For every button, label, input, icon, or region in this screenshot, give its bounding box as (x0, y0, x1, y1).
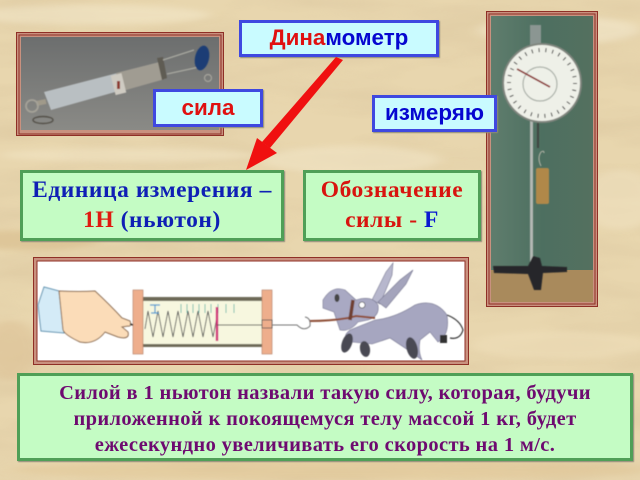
box: unit of measurement: Единица измерения – (32, 177, 272, 203)
label: Динамометр: Динамометр (270, 25, 408, 50)
box: newton definition: ежесекундно увеличивать его скорость на 1 м/с. (95, 434, 555, 456)
label: измеряю: измеряю (385, 100, 484, 125)
box: force symbol: силы - F (345, 207, 439, 233)
box: newton definition (17, 373, 633, 461)
label: измеряю (372, 95, 497, 132)
label: сила (153, 89, 263, 127)
icon: spring scale (130, 290, 310, 354)
photo: spring dynamometer (16, 32, 224, 136)
icon: hand (38, 287, 131, 343)
illustration: hand, dynamometer and donkey (33, 257, 469, 365)
box: newton definition: Силой в 1 ньютон назвали такую силу, которая, будучи (59, 382, 591, 404)
photo: dial dynamometer on stand (486, 11, 598, 307)
arrow: from Динамометр to unit box (246, 57, 343, 170)
icon: donkey (310, 263, 463, 360)
box: newton definition: приложенной к покоящемуся телу массой 1 кг, будет (73, 408, 577, 430)
label: сила: сила (182, 95, 234, 120)
label: Динамометр (239, 20, 439, 57)
box: force symbol (303, 170, 481, 241)
box: unit of measurement (20, 170, 284, 241)
box: force symbol: Обозначение (321, 177, 463, 203)
box: unit of measurement: 1Н (ньютон) (83, 207, 221, 233)
